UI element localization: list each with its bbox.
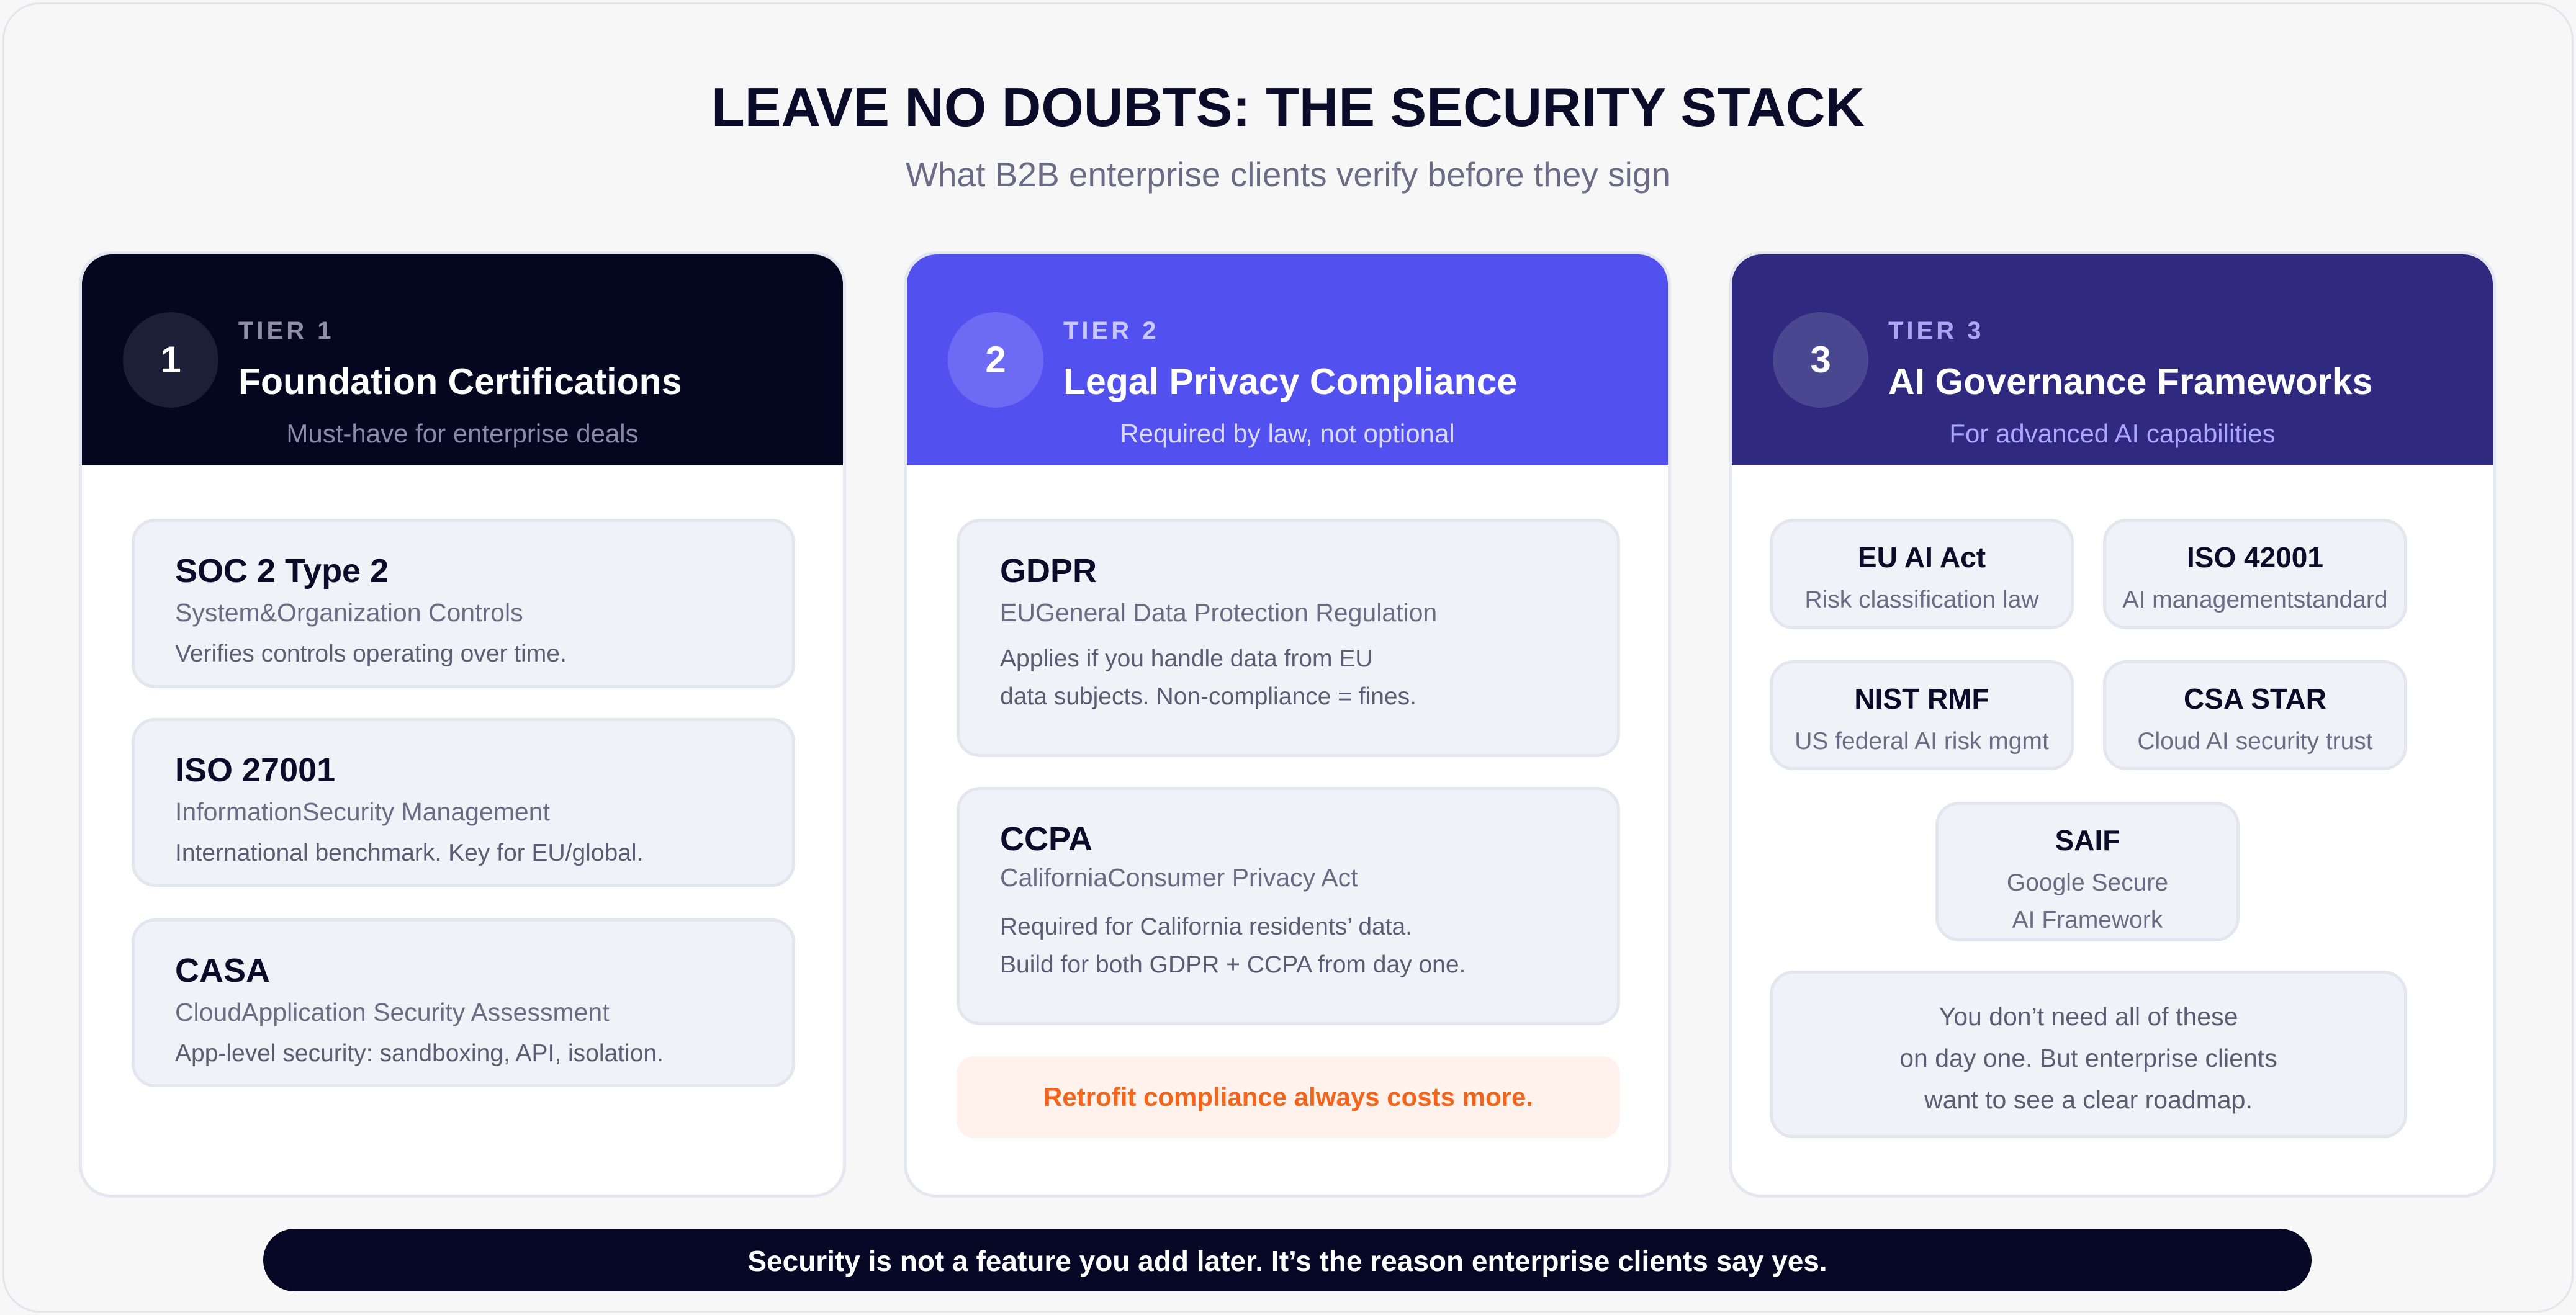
card: SOC 2: System&Organization Controls bbox=[175, 598, 523, 627]
box: NIST RMF: NIST RMF bbox=[1854, 683, 1989, 715]
card: CCPA bbox=[957, 787, 1620, 1025]
card: ISO 27001: ISO 27001 bbox=[175, 752, 335, 789]
tier 3 title: AI Governance Frameworks bbox=[1888, 361, 2372, 402]
box: ISO 42001 bbox=[2103, 519, 2407, 629]
card: CASA: App-level security: sandboxing, API, isolation. bbox=[175, 1040, 664, 1067]
icon: number 1: 1 bbox=[160, 339, 181, 380]
card: SOC 2: Verifies controls operating over time. bbox=[175, 640, 567, 667]
tier 2 label: TIER 2 bbox=[1063, 317, 1159, 344]
panel: tier 2 bbox=[904, 251, 1671, 1198]
tier 3 header bbox=[1732, 254, 2493, 465]
tier 3 label: TIER 3 bbox=[1888, 317, 1984, 344]
title: LEAVE NO DOUBTS: THE SECURITY STACK bbox=[711, 76, 1865, 138]
callout: retrofit: Retrofit compliance always costs more. bbox=[1043, 1082, 1533, 1111]
card: ISO 27001: InformationSecurity Management bbox=[175, 797, 550, 826]
tier 1 label: TIER 1 bbox=[238, 317, 334, 344]
bottom banner: Security is not a feature you add later. It’s the reason enterprise clients say yes. bbox=[747, 1245, 1827, 1277]
card: CASA: CASA bbox=[175, 952, 270, 989]
box: ISO 42001: AI managementstandard bbox=[2122, 586, 2388, 613]
note: roadmap: want to see a clear roadmap. bbox=[1924, 1085, 2253, 1114]
card: CCPA: Required for California residents’ data. bbox=[1000, 913, 1412, 940]
box: SAIF: AI Framework bbox=[2012, 907, 2163, 933]
tier 2 subtitle: Required by law, not optional bbox=[1120, 419, 1455, 448]
icon: number 3 bbox=[1773, 312, 1868, 408]
note: roadmap bbox=[1770, 971, 2407, 1138]
card: SOC 2 bbox=[132, 519, 795, 688]
bottom banner bbox=[263, 1229, 2312, 1291]
box: ISO 42001: ISO 42001 bbox=[2187, 541, 2323, 573]
card: GDPR: Applies if you handle data from EU bbox=[1000, 645, 1373, 672]
box: EU AI Act: Risk classification law bbox=[1804, 586, 2039, 613]
box: CSA STAR: Cloud AI security trust bbox=[2137, 728, 2373, 755]
tier 1 title: Foundation Certifications bbox=[238, 361, 682, 402]
icon: number 2: 2 bbox=[985, 339, 1006, 380]
tier 2 title: Legal Privacy Compliance bbox=[1063, 361, 1517, 402]
box: NIST RMF bbox=[1770, 660, 2074, 770]
tier 1 subtitle: Must-have for enterprise deals bbox=[286, 419, 639, 448]
card: ISO 27001 bbox=[132, 718, 795, 887]
tier 1 header bbox=[82, 254, 843, 465]
icon: number 2 bbox=[948, 312, 1043, 408]
card: GDPR bbox=[957, 519, 1620, 757]
box: SAIF bbox=[1935, 802, 2240, 941]
box: SAIF: SAIF bbox=[2055, 824, 2120, 856]
box: CSA STAR bbox=[2103, 660, 2407, 770]
card: GDPR: EUGeneral Data Protection Regulation bbox=[1000, 598, 1437, 627]
tier 3 subtitle: For advanced AI capabilities bbox=[1949, 419, 2276, 448]
card: ISO 27001: International benchmark. Key for EU/global. bbox=[175, 840, 643, 866]
panel: tier 3 bbox=[1729, 251, 2496, 1198]
subtitle: What B2B enterprise clients verify before they sign bbox=[906, 155, 1670, 194]
box: CSA STAR: CSA STAR bbox=[2184, 683, 2326, 715]
tier 2 header bbox=[907, 254, 1668, 465]
card: CCPA: CaliforniaConsumer Privacy Act bbox=[1000, 863, 1358, 892]
card: GDPR: GDPR bbox=[1000, 552, 1097, 590]
card: CASA bbox=[132, 918, 795, 1087]
box: NIST RMF: US federal AI risk mgmt bbox=[1795, 728, 2049, 755]
icon: number 1 bbox=[123, 312, 218, 408]
icon: number 3: 3 bbox=[1810, 339, 1831, 380]
card: GDPR: data subjects. Non-compliance = fines. bbox=[1000, 683, 1416, 710]
callout: retrofit bbox=[957, 1056, 1620, 1138]
box: EU AI Act: EU AI Act bbox=[1858, 541, 1986, 573]
note: roadmap: You don’t need all of these bbox=[1939, 1002, 2238, 1031]
box: SAIF: Google Secure bbox=[2007, 869, 2168, 896]
box: EU AI Act bbox=[1770, 519, 2074, 629]
panel: tier 1 bbox=[79, 251, 846, 1198]
card: CCPA: CCPA bbox=[1000, 820, 1092, 858]
card: SOC 2: SOC 2 Type 2 bbox=[175, 552, 389, 590]
card: CCPA: Build for both GDPR + CCPA from day one. bbox=[1000, 951, 1466, 978]
note: roadmap: on day one. But enterprise clients bbox=[1899, 1044, 2277, 1072]
card: CASA: CloudApplication Security Assessment bbox=[175, 998, 610, 1026]
